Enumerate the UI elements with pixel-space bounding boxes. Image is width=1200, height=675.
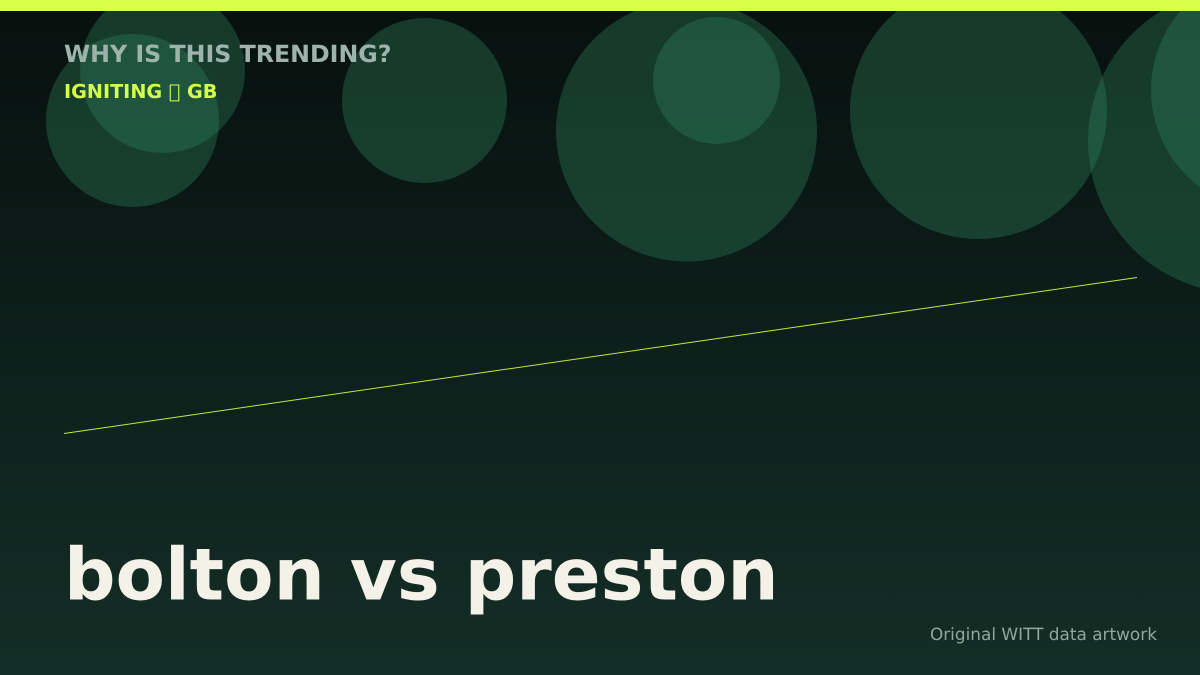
- eyebrow heading: WHY IS THIS TRENDING?: [64, 40, 391, 68]
- credit: Original WITT data artwork: [930, 624, 1157, 644]
- main title: bolton vs preston: [64, 532, 779, 616]
- trend line: [64, 278, 1137, 434]
- top accent bar: [0, 0, 1200, 11]
- status label: IGNITING  GB: [64, 80, 217, 103]
- bubble cluster: [46, 0, 1200, 293]
